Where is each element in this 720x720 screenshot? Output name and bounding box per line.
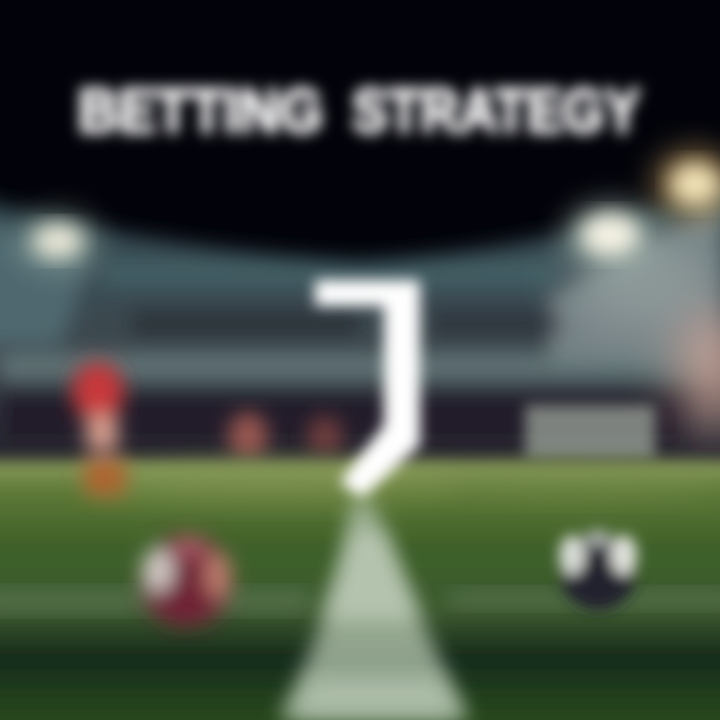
warm haze on the right [570, 230, 720, 430]
night sky [0, 0, 720, 270]
title [78, 77, 640, 146]
red soccer ball [140, 535, 232, 627]
title: STRATEGY [352, 77, 640, 146]
stadium stands [0, 170, 720, 470]
floodlights [16, 146, 720, 271]
pitch [0, 460, 720, 720]
title: BETTING [78, 77, 323, 146]
goal on the right [525, 405, 655, 460]
dark and white soccer ball [559, 530, 637, 610]
distant players [228, 412, 343, 460]
player in red [72, 362, 126, 496]
white number 7 arrow [278, 280, 470, 720]
